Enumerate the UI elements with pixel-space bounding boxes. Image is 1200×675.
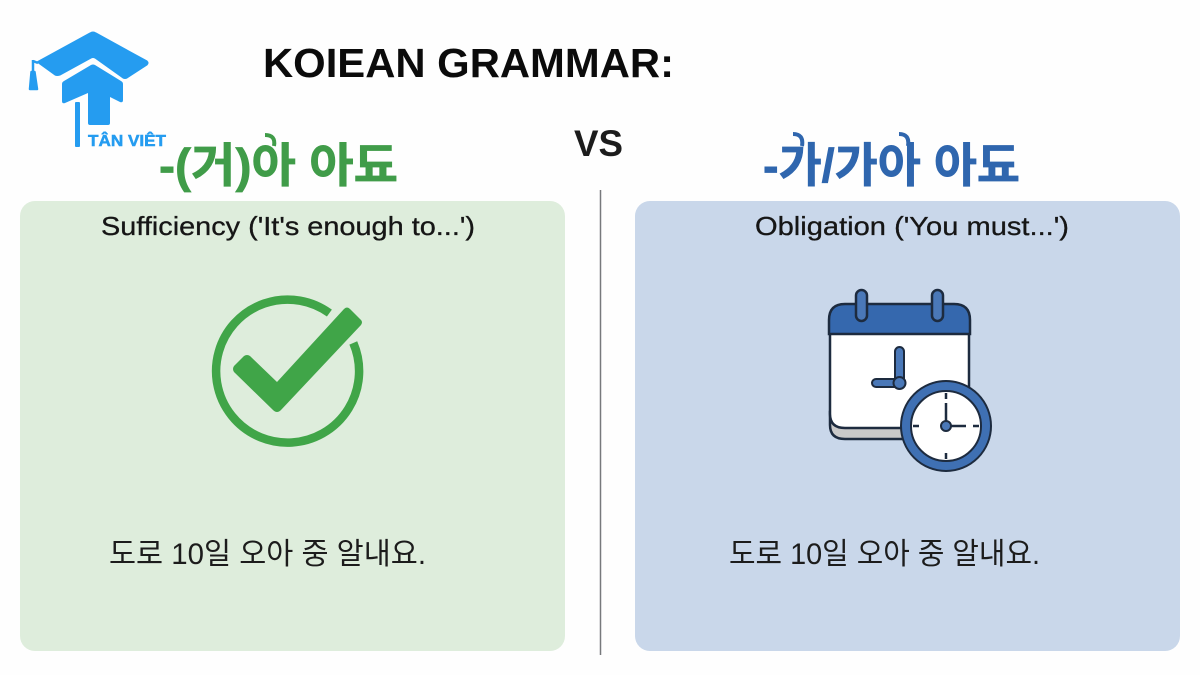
panel background bbox=[20, 201, 565, 651]
clock face bbox=[906, 386, 986, 466]
icon: logo bar bbox=[75, 102, 80, 147]
logo text: TÂN VIÊT bbox=[88, 131, 166, 150]
title: KOIEAN GRAMMAR: bbox=[263, 40, 674, 86]
panel: sufficiency bbox=[20, 201, 565, 651]
panel heading: Sufficiency ('It's enough to...') bbox=[101, 211, 475, 241]
logo: Tan Viet bbox=[30, 32, 166, 150]
heading: green grammar form: -(거)아 아됴 bbox=[159, 139, 398, 192]
clock ticks and hands bbox=[913, 393, 979, 459]
icon: tassel bbox=[30, 60, 38, 89]
example sentence: 도로 10일 오아 중 알내요. bbox=[109, 538, 426, 571]
panel background bbox=[635, 201, 1180, 651]
panel heading: Obligation ('You must...') bbox=[755, 211, 1069, 241]
icon: graduation cap bbox=[37, 32, 148, 78]
icon: check mark in circle bbox=[216, 300, 362, 443]
center divider bbox=[600, 190, 602, 655]
calendar rings bbox=[856, 290, 867, 321]
calendar header bbox=[829, 304, 970, 334]
icon: arrow bbox=[62, 64, 123, 125]
calendar body bbox=[830, 334, 969, 428]
heading: blue grammar form: -가/가아 아됴 bbox=[763, 139, 1020, 192]
calendar page shadow bbox=[830, 412, 925, 439]
example sentence: 도로 10일 오아 중 알내요. bbox=[729, 538, 1040, 571]
icon: calendar with clock bbox=[829, 290, 991, 471]
vs label: VS bbox=[574, 123, 623, 164]
calendar clock hands bbox=[895, 347, 904, 385]
panel: obligation bbox=[635, 201, 1180, 651]
